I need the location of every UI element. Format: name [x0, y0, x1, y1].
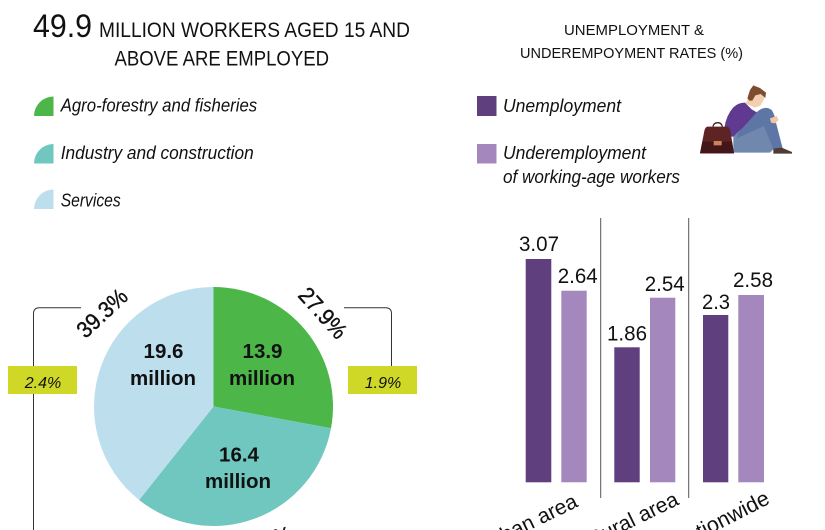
- heading: unemployment and underemployment rates: UNDEREMPOYMENT RATES (%): [520, 45, 743, 62]
- group: urban area: 2.64: [558, 265, 598, 288]
- legend item: underemployment: Underemployment: [503, 143, 647, 163]
- heading: unemployment and underemployment rates: UNEMPLOYMENT &: [564, 22, 704, 39]
- icon: worker sitting with briefcase: [700, 85, 792, 154]
- pie value: agro-forestry: 13.9: [243, 340, 282, 363]
- hand: [770, 116, 779, 123]
- percentage label: agro-forestry share: 27.9%: [293, 282, 353, 344]
- briefcase: [700, 123, 734, 153]
- title: workers employed: MILLION WORKERS AGED 15 AND: [99, 19, 410, 42]
- pie value: services: [130, 340, 196, 390]
- pie value: services: million: [130, 367, 196, 390]
- group: nationwide: 2.58: [733, 269, 773, 292]
- group: rural area: 1.86: [607, 323, 647, 346]
- group: rural area: 2.54: [645, 273, 685, 296]
- torso: [724, 103, 757, 137]
- legend item: services: Services: [61, 191, 121, 211]
- title: workers employed: [33, 8, 410, 70]
- legend item: unemployment: Unemployment: [503, 96, 622, 116]
- callout: 2.4%: 2.4%: [24, 375, 61, 392]
- shoe: [773, 148, 792, 154]
- pie value: agro-forestry: [229, 340, 295, 390]
- callout: 1.9%: [348, 366, 417, 394]
- pie value: industry: 16.4: [219, 444, 260, 466]
- group: urban area: 3.07: [519, 233, 559, 256]
- pie value: agro-forestry: million: [229, 367, 295, 390]
- percentage label: services share: 39.3%: [71, 283, 133, 343]
- group: nationwide: [668, 269, 773, 530]
- legend item: underemployment: of working-age workers: [503, 167, 680, 187]
- bracket: left: [34, 308, 81, 530]
- callout: 2.4%: [8, 366, 77, 394]
- legend item: industry and construction: Industry and construction: [61, 143, 254, 163]
- heading: unemployment and underemployment rates: [520, 22, 743, 62]
- pie slice: services: [94, 287, 214, 500]
- lower body: [733, 125, 774, 153]
- bracket: right: [344, 308, 392, 366]
- legend item: services: [34, 190, 121, 211]
- bar chart: rates by area: [477, 218, 773, 530]
- pie value: industry: [205, 444, 271, 493]
- legend item: agro-forestry and fisheries: Agro-forestry and fisheries: [60, 96, 257, 116]
- pie chart: employment by sector: [94, 287, 333, 526]
- group: nationwide: 2.3: [702, 291, 730, 314]
- pie slice: industry and construction: [139, 406, 331, 526]
- callout: 1.9%: 1.9%: [365, 375, 401, 392]
- near leg: [737, 108, 783, 149]
- pie value: industry: million: [205, 470, 271, 493]
- group: rural area: [584, 273, 685, 530]
- title: workers employed: ABOVE ARE EMPLOYED: [114, 48, 329, 70]
- group: urban area: [477, 233, 598, 530]
- title: workers employed: 49.9: [33, 8, 92, 44]
- legend item: underemployment: [477, 143, 680, 187]
- pie slice: agro-forestry and fisheries: [214, 287, 333, 428]
- legend: employment sectors: [34, 96, 257, 211]
- pie value: services: 19.6: [144, 340, 183, 363]
- hair: [747, 85, 766, 101]
- head: [745, 93, 765, 108]
- legend: rates: [477, 96, 680, 187]
